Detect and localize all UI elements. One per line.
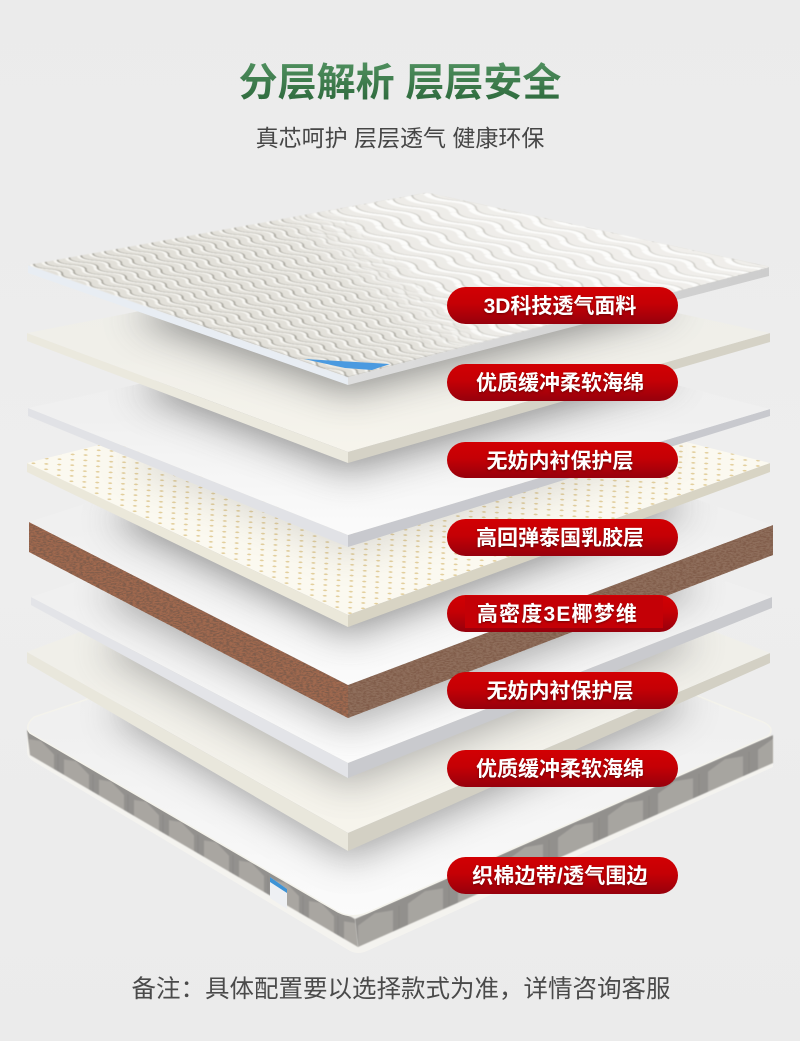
- label: non-woven lining: 无妨内衬保护层: [486, 679, 634, 703]
- foam left side: [27, 652, 348, 851]
- coir shadow: [104, 500, 694, 654]
- layer 1: 3D quilted fabric: [28, 193, 769, 385]
- latex left side: [27, 463, 348, 627]
- label: woven edge: [447, 857, 678, 894]
- label: non-woven lining: [447, 672, 678, 709]
- label: latex: 高回弹泰国乳胶层: [476, 526, 644, 550]
- foam top surface: [27, 257, 770, 452]
- layer 3: non-woven lining: [28, 382, 770, 547]
- label: 3D fabric: 3D科技透气面料: [484, 295, 636, 318]
- label: cushion foam: 优质缓冲柔软海绵: [476, 372, 644, 395]
- label: coconut fibre: [447, 595, 678, 632]
- layer 4: latex: [27, 440, 770, 627]
- title: 分层解析 层层安全: [239, 62, 561, 105]
- latex right side: [348, 463, 770, 627]
- fabric left side: [28, 265, 348, 385]
- foam right side: [348, 333, 770, 463]
- fabric label tag: [304, 359, 390, 370]
- lining top surface: [28, 321, 770, 535]
- foam shadow: [96, 637, 702, 801]
- layer 7: cushion foam: [27, 634, 770, 851]
- layer 8: woven cotton edge base: [26, 698, 774, 952]
- foam left side: [27, 333, 348, 463]
- lining shadow: [94, 569, 704, 742]
- label: coconut fibre: 高密度3E椰梦维: [477, 602, 638, 626]
- lining right side: [348, 597, 772, 778]
- coir top surface: [29, 400, 773, 685]
- subtitle: 真芯呵护 层层透气 健康环保: [256, 125, 544, 151]
- label: cushion foam: [447, 750, 678, 787]
- foam right side: [348, 653, 770, 851]
- lining right side: [348, 409, 770, 547]
- latex shadow: [133, 460, 630, 562]
- footer note: 备注：具体配置要以选择款式为准，详情咨询客服: [132, 975, 670, 1003]
- lining top surface: [31, 470, 772, 763]
- layer 6: non-woven lining: [31, 569, 772, 778]
- base piping: [27, 730, 773, 953]
- lining shadow: [130, 382, 680, 491]
- lining left side: [28, 408, 348, 547]
- base top surface: [28, 578, 771, 916]
- label: non-woven lining: 无妨内衬保护层: [486, 449, 634, 473]
- label: non-woven lining: [447, 442, 678, 478]
- layer 2: cushion foam: [27, 308, 770, 463]
- foam shadow: [126, 308, 681, 413]
- label: woven edge: 织棉边带/透气围边: [472, 865, 648, 888]
- fabric quilted surface: [28, 193, 769, 377]
- label: cushion foam: [447, 364, 678, 401]
- label: cushion foam: 优质缓冲柔软海绵: [476, 758, 644, 781]
- label: 3D fabric: [447, 287, 678, 324]
- foam top surface: [27, 510, 770, 833]
- lining left side: [31, 597, 348, 778]
- latex top surface: [27, 370, 770, 615]
- coir left side: [29, 522, 348, 718]
- coir right side: [348, 525, 773, 718]
- fabric right side: [348, 267, 769, 385]
- base right quilted side: [355, 735, 773, 947]
- label: latex: [447, 519, 678, 556]
- base left quilted side: [27, 730, 358, 947]
- base shadow: [102, 696, 696, 875]
- layer 5: coconut fibre: [29, 501, 773, 718]
- fabric surface sheen: [28, 193, 769, 377]
- base label tag: [270, 877, 287, 909]
- fabric larger quilting at the back: [293, 193, 764, 350]
